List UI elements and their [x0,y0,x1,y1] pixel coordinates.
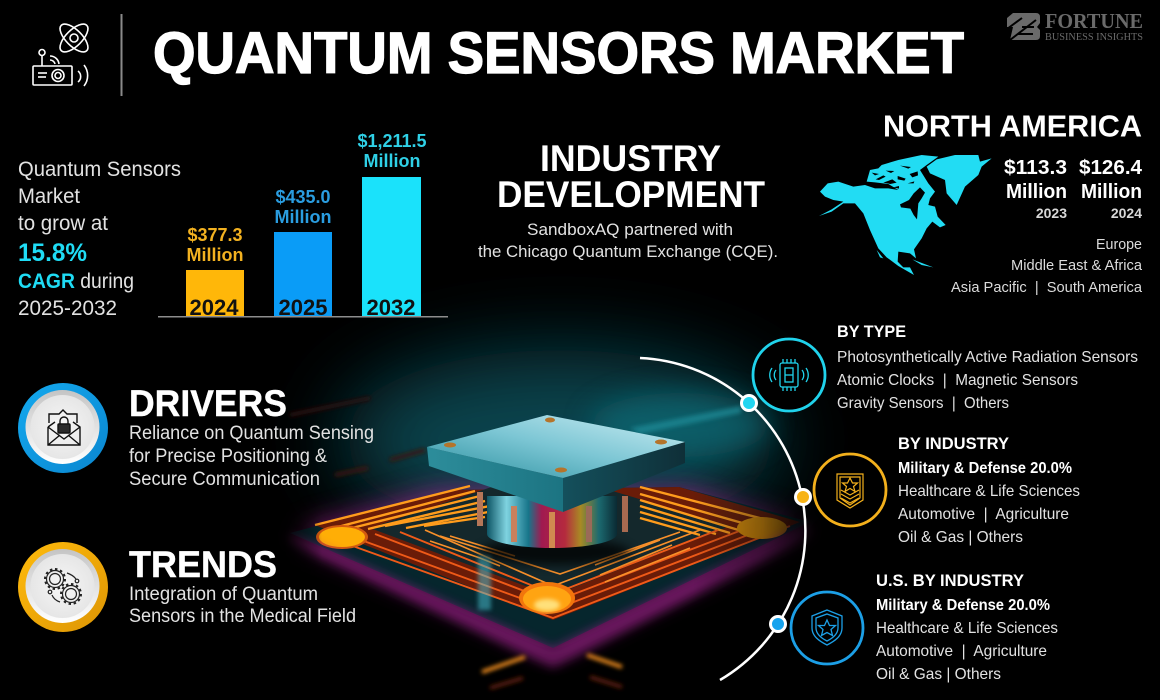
CAGR text block [18,158,181,320]
north america values [1004,157,1143,221]
by type [837,322,1138,412]
north america values: 2023 [1036,205,1067,221]
trends text: Integration of Quantum [129,584,318,605]
by industry: Healthcare & Life Sciences [898,483,1080,500]
chip block [427,415,685,512]
by industry: BY INDUSTRY [898,434,1010,453]
north america values: Million [1006,181,1067,203]
drivers icon [18,383,108,473]
north america values: 2024 [1111,205,1142,221]
drivers text: for Precise Positioning & [129,446,327,467]
bar 2032: 2032 [366,295,416,320]
icon: chip in cyan ring [753,339,825,411]
bar 2025 [274,187,332,320]
other regions: Middle East & Africa [1011,257,1143,274]
segment arc with nodes [640,358,810,680]
header divider [120,14,122,96]
by type: Gravity Sensors | Others [837,395,1009,412]
CAGR text block: CAGR during [18,270,134,293]
U.S. by industry: Healthcare & Life Sciences [876,620,1058,637]
trends text [129,544,356,627]
bar chart: market size [158,131,448,320]
CAGR text block: Quantum Sensors [18,158,181,181]
trends text: Sensors in the Medical Field [129,606,356,627]
drivers text: Secure Communication [129,469,320,490]
other regions: Asia Pacific | South America [951,279,1143,296]
background image: quantum sensor chip on circuit board [285,350,815,688]
north america values: Million [1081,181,1142,203]
north america heading: NORTH AMERICA [883,108,1142,144]
by type: Photosynthetically Active Radiation Sensors [837,349,1138,366]
map: North America [819,155,992,275]
U.S. by industry: U.S. BY INDUSTRY [876,571,1025,590]
circuit solder pads [316,517,787,614]
by type: Atomic Clocks | Magnetic Sensors [837,372,1078,389]
by industry [898,434,1080,546]
CAGR text block: to grow at [18,212,108,235]
lower reflection streaks [290,398,622,688]
industry development: DEVELOPMENT [497,174,765,215]
bar 2025: $435.0 [275,187,331,207]
logo: Fortune Business Insights [1007,9,1143,43]
by industry: Military & Defense 20.0% [898,460,1072,477]
by industry: Automotive | Agriculture [898,506,1069,523]
drivers text [129,383,374,490]
drivers text: Reliance on Quantum Sensing [129,423,374,444]
by industry: Oil & Gas | Others [898,529,1023,546]
industry development: the Chicago Quantum Exchange (CQE). [478,242,778,261]
industry development [478,138,778,261]
north america values: $126.4 [1079,157,1143,179]
north america values: $113.3 [1004,157,1067,179]
bar 2032: $1,211.5 [357,131,427,151]
U.S. by industry [876,571,1058,683]
bar 2025: Million [274,207,332,227]
CAGR text block: 2025-2032 [18,297,117,320]
trends text: TRENDS [129,544,277,585]
icon: quantum atom and radio sensor [33,20,92,86]
by type: BY TYPE [837,322,906,341]
icon: military badge in orange ring [814,454,886,526]
industry development: INDUSTRY [540,138,721,179]
CAGR text block: Market [18,185,80,208]
trends icon [18,542,108,632]
U.S. by industry: Oil & Gas | Others [876,666,1001,683]
U.S. by industry: Military & Defense 20.0% [876,597,1050,614]
icon: shield in blue ring [791,592,863,664]
drivers text: DRIVERS [129,383,287,424]
bar 2024: $377.3 [187,225,243,245]
logo: Fortune Business Insights: FORTUNE [1045,9,1143,33]
bar 2024 [186,225,244,320]
bar 2025: 2025 [278,295,328,320]
industry development: SandboxAQ partnered with [527,220,733,239]
title: QUANTUM SENSORS MARKET [153,21,964,86]
other regions [951,236,1143,296]
bar 2024: 2024 [190,295,239,320]
CAGR text block: 15.8% [18,239,87,267]
bar 2032 [357,131,427,320]
bar 2024: Million [186,245,244,265]
U.S. by industry: Automotive | Agriculture [876,643,1047,660]
other regions: Europe [1096,236,1142,253]
bar 2032: Million [364,151,420,171]
chip stem [477,492,628,548]
logo: Fortune Business Insights: BUSINESS INSIGHTS [1045,32,1143,43]
